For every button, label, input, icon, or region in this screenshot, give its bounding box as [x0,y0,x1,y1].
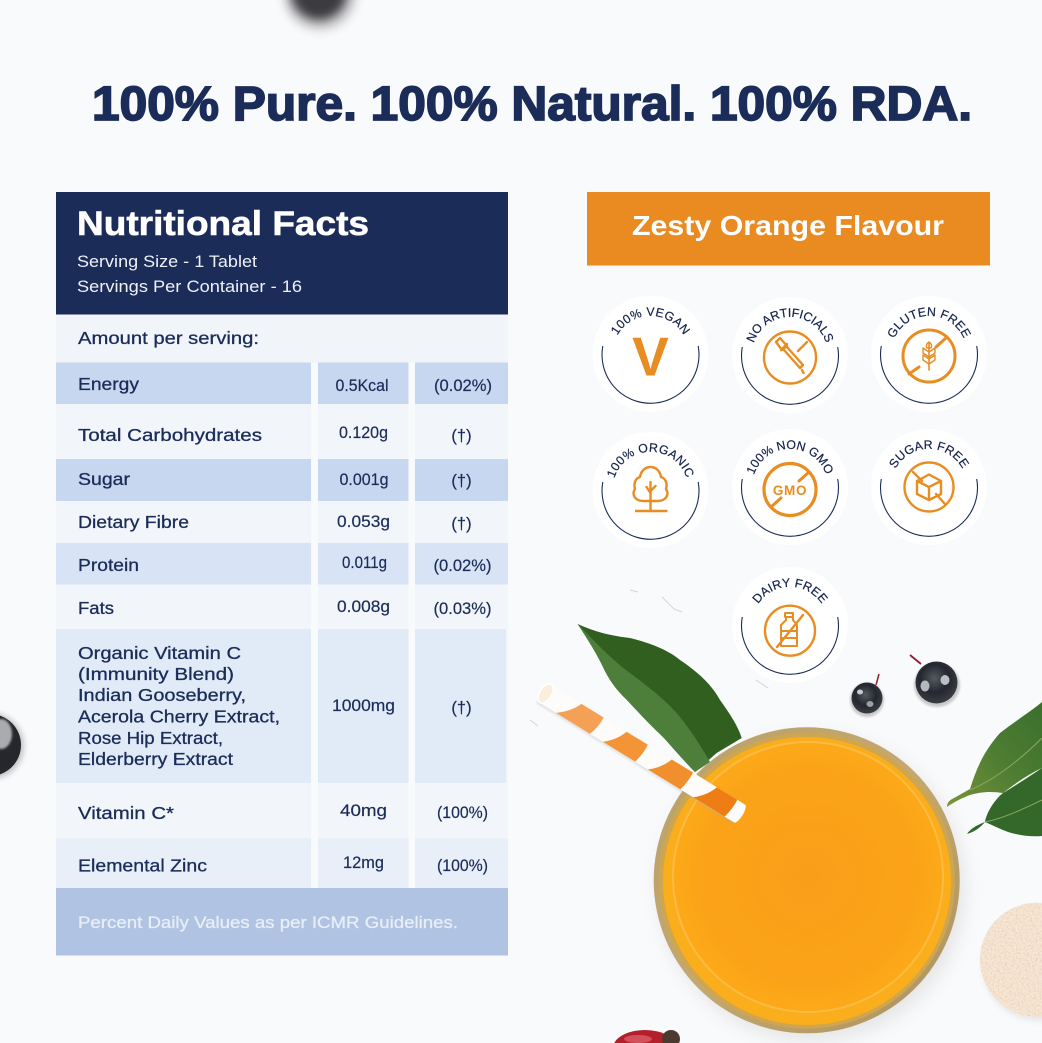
row: total carbohydrates: (†) [451,427,472,445]
row: vitamin c: Vitamin C* [78,803,174,823]
badge: no artificials [740,308,840,405]
small elderberry [850,674,884,717]
row: organic vitamin c blend: Rose Hip Extract, [78,728,223,748]
table header: Servings Per Container - 16 [77,277,302,296]
badge: dairy free: DAIRY FREE [752,578,828,604]
row: organic vitamin c blend: Indian Gooseberry, [78,685,246,705]
row: energy: 0.5Kcal [336,377,388,395]
row: organic vitamin c blend: Acerola Cherry Extract, [78,706,280,726]
juice [663,737,951,1025]
row: fats: 0.008g [337,598,390,616]
badge: 100% non gmo: 100% NON GMO [747,440,833,474]
row: total carbohydrates: Total Carbohydrates [78,425,262,445]
amount per serving row [56,314,508,362]
row: protein: Protein [78,555,139,575]
table footer note: Percent Daily Values as per ICMR Guidelines. [78,913,458,932]
badge: no artificials: NO ARTIFICIALS [746,308,834,342]
row: dietary fibre: 0.053g [337,513,390,531]
row: total carbohydrates: 0.120g [339,424,388,442]
row: energy [78,374,492,395]
badge: 100% organic [601,443,700,540]
left cropped berry [0,713,24,779]
badge: 100% vegan: 100% VEGAN [612,307,690,335]
row: organic vitamin c blend: (†) [451,699,472,717]
row: vitamin c: 40mg [340,802,387,820]
row: vitamin c [78,802,488,823]
icon: crossed milk bottle [765,606,815,656]
row: fats: (0.03%) [434,600,492,618]
top berry, cropped and blurred [284,0,356,30]
glass of orange juice [654,727,965,1041]
tablet [980,903,1042,1021]
row: dietary fibre: (†) [451,515,472,533]
glass rim [654,727,960,1033]
badge: sugar free: SUGAR FREE [890,440,970,468]
badge: 100% vegan [601,307,700,404]
table header: Nutritional Facts [77,205,369,243]
flavour banner: Zesty Orange Flavour [632,210,944,241]
flavour banner [587,192,990,266]
icon: tree [634,467,668,511]
row: organic vitamin c blend: 1000mg [332,697,395,715]
badge: sugar free [880,440,978,537]
row: organic vitamin c blend: (Immunity Blend) [78,664,234,684]
row: sugar: 0.001g [340,471,388,489]
large elderberry [910,655,960,707]
badge: gluten free [880,307,978,404]
table header [56,192,508,314]
badge: 100% organic: 100% ORGANIC [608,443,694,478]
orange leaf behind glass [578,624,742,772]
badge: 100% non gmo [740,440,840,537]
row: energy: (0.02%) [434,377,492,395]
row: fats [78,598,492,618]
row: elemental zinc [78,854,488,876]
row: elemental zinc: (100%) [437,857,488,875]
rose hip [613,1030,680,1043]
row: sugar: Sugar [78,469,130,489]
right leaves [947,702,1042,836]
badge: dairy free [740,578,840,675]
striped straw [534,681,748,826]
table header: Serving Size - 1 Tablet [77,252,257,271]
leaf upper [947,702,1042,807]
icon: letter V: V [632,326,669,388]
icon: crossed dropper [764,332,816,384]
row: total carbohydrates [78,424,472,445]
icon: crossed gmo: GMO [773,483,807,498]
row: dietary fibre: Dietary Fibre [78,512,189,532]
icon: crossed sugar cube [904,462,954,512]
row: protein [78,554,492,575]
badge: gluten free: GLUTEN FREE [888,307,972,338]
row: sugar: (†) [451,472,472,490]
row: energy: Energy [78,374,139,394]
icon: crossed wheat [903,330,955,382]
row: dietary fibre [78,512,472,533]
panel: nutritional facts table [56,192,508,956]
table row backgrounds [56,362,508,888]
row: organic vitamin c blend: Elderberry Extract [78,749,233,769]
leaf lower [967,768,1042,836]
amount per serving row: Amount per serving: [78,328,259,348]
row: protein: (0.02%) [434,557,492,575]
row: organic vitamin c blend [78,643,472,769]
table footer note [56,888,508,956]
row: organic vitamin c blend: Organic Vitamin C [78,643,241,663]
row: vitamin c: (100%) [437,804,488,822]
row: elemental zinc: Elemental Zinc [78,856,207,876]
row: fats: Fats [78,598,114,618]
row: sugar [78,469,472,490]
title: 100% Pure. 100% Natural. 100% RDA. [92,78,972,131]
row: protein: 0.011g [342,554,387,572]
row: elemental zinc: 12mg [343,854,384,872]
